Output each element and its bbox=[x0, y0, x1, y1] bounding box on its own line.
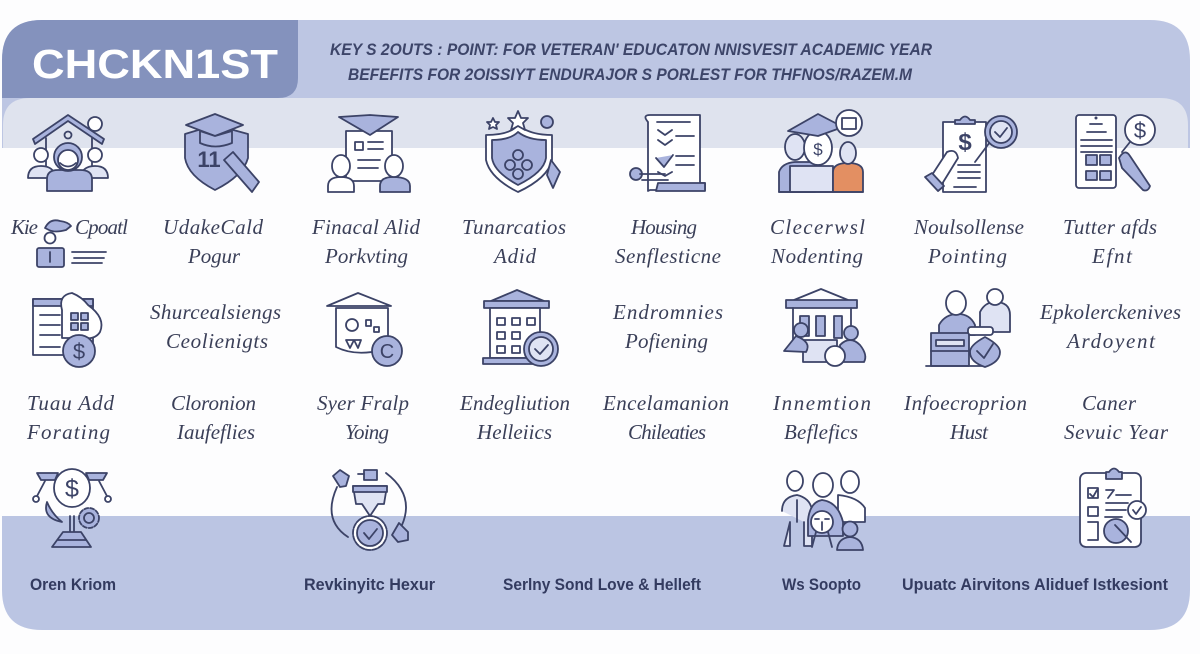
text: row 3 labels: Beflefics bbox=[784, 420, 858, 444]
text: second-row label: Ardoyent bbox=[1065, 329, 1156, 353]
text: row 1 labels: Pointing bbox=[927, 244, 1007, 268]
text: row 1 labels: Kie bbox=[10, 215, 38, 239]
text: row 1 labels bbox=[10, 215, 1157, 268]
icon: service desk with people and shield bbox=[926, 289, 1010, 367]
icon: calendar cloud with dollar coin bbox=[33, 293, 102, 367]
text: second-row label: Pofiening bbox=[624, 329, 708, 353]
text: row 1 labels: Finacal Alid bbox=[311, 215, 420, 239]
text: second-row label bbox=[150, 300, 281, 353]
text: row 1 labels: Pogur bbox=[187, 244, 241, 268]
text: bottom band labels bbox=[30, 576, 1168, 594]
text: row 3 labels: Endegliution bbox=[459, 391, 570, 415]
text: second-row label: Endromnies bbox=[612, 300, 723, 324]
icon: institution with advisers bbox=[784, 289, 865, 366]
text: row 1 labels: Efnt bbox=[1091, 244, 1133, 268]
text: bottom band labels: Serlny Sond Love & Helleft bbox=[503, 576, 701, 594]
title: CHCKN1ST bbox=[32, 41, 278, 87]
text: row 3 labels: Innemtion bbox=[772, 391, 871, 415]
text: row 3 labels: Sevuic Year bbox=[1064, 420, 1169, 444]
icon: house with family bbox=[28, 115, 108, 191]
text: row 3 labels: Yoing bbox=[345, 420, 389, 444]
text: row 1 labels: Cpoatl bbox=[75, 215, 128, 239]
text: row 3 labels: Helleiics bbox=[476, 420, 552, 444]
text: row 3 labels: Caner bbox=[1082, 391, 1137, 415]
text: row 3 labels: Infoecroprion bbox=[903, 391, 1027, 415]
text: second-row label: Ceolienigts bbox=[166, 329, 268, 353]
text: row 1 labels: Noulsollense bbox=[913, 215, 1024, 239]
subtitle: KEY S 2OUTS : POINT: FOR VETERAN' EDUCATON NNISVESIT ACADEMIC YEAR bbox=[330, 41, 932, 59]
text: row 1 labels: Tutter afds bbox=[1063, 215, 1157, 239]
text: row 1 labels: Senflesticne bbox=[615, 244, 721, 268]
text: row 3 labels: Forating bbox=[26, 420, 110, 444]
text: row 3 labels: Iaufeflies bbox=[176, 420, 255, 444]
icon: clipboard checklist bbox=[1080, 468, 1146, 547]
text: bottom band labels: Upuatc Airvitons Aliduef Istkesiont bbox=[902, 576, 1168, 594]
text: row 1 labels: Porkvting bbox=[324, 244, 408, 268]
icon: calculator and dollar tool bbox=[1076, 115, 1155, 190]
text: row 1 labels: Clecerwsl bbox=[770, 215, 865, 239]
icon: dollar scale with gear bbox=[33, 469, 111, 547]
icon: dollar scale with gear: $ bbox=[65, 475, 79, 503]
icon: person at desk with speech cloud bbox=[37, 220, 106, 267]
text: row 1 labels: UdakeCald bbox=[163, 215, 264, 239]
text: second-row label bbox=[612, 300, 723, 353]
subtitle: BEFEFITS FOR 2OISSIYT ENDURAJOR S PORLEST FOR THFNOS/RAZEM.M bbox=[348, 66, 913, 84]
icon: graduate family bbox=[779, 110, 863, 192]
text: row 1 labels: Adid bbox=[492, 244, 536, 268]
icon: document with magnifier and hand: $ bbox=[958, 129, 972, 156]
icon: graduate family: $ bbox=[813, 140, 823, 159]
panel: bottom band bbox=[2, 516, 1190, 630]
panel: title block bbox=[2, 20, 298, 98]
text: row 3 labels: Tuau Add bbox=[27, 391, 114, 415]
icon: shield with graduation cap and pencil: 11 bbox=[197, 147, 221, 172]
text: row 1 labels: Nodenting bbox=[770, 244, 863, 268]
text: second-row label: Shurcealsiengs bbox=[150, 300, 281, 324]
text: bottom band labels: Ws Soopto bbox=[782, 576, 861, 594]
text: row 3 labels bbox=[26, 391, 1169, 444]
text: row 3 labels: Hust bbox=[949, 420, 989, 444]
icon: domed building with coin: C bbox=[380, 341, 394, 363]
icon: office building with badge bbox=[483, 290, 558, 366]
icon: domed building with coin bbox=[327, 293, 402, 366]
text: bottom band labels: Oren Kriom bbox=[30, 576, 116, 594]
panel: light band under header bbox=[3, 98, 1188, 148]
icon: certificate with two people bbox=[328, 115, 410, 192]
text: second-row label: Epkolerckenives bbox=[1039, 300, 1181, 324]
panel: top header band bbox=[2, 20, 1190, 148]
text: row 3 labels: Syer Fralp bbox=[317, 391, 409, 415]
text: bottom band labels: Revkinyitc Hexur bbox=[304, 576, 436, 594]
icon: scroll checklist bbox=[630, 115, 705, 191]
text: row 3 labels: Encelamanion bbox=[602, 391, 729, 415]
text: row 1 labels: Tunarcatios bbox=[462, 215, 566, 239]
icon: calculator and dollar tool: $ bbox=[1134, 118, 1146, 143]
icon: calendar cloud with dollar coin: $ bbox=[73, 339, 85, 364]
icon: shield with graduation cap and pencil bbox=[185, 114, 259, 192]
text: second-row label bbox=[1039, 300, 1181, 353]
icon: shield with stars bbox=[486, 111, 560, 192]
icon: document with magnifier and hand bbox=[925, 116, 1017, 192]
text: row 3 labels: Chileaties bbox=[628, 420, 706, 444]
text: row 1 labels: Housing bbox=[630, 215, 697, 239]
icon: group of people bbox=[782, 471, 865, 550]
text: row 3 labels: Cloronion bbox=[171, 391, 256, 415]
icon: medal in gear with arrows bbox=[332, 470, 408, 550]
subtitle bbox=[330, 41, 932, 84]
